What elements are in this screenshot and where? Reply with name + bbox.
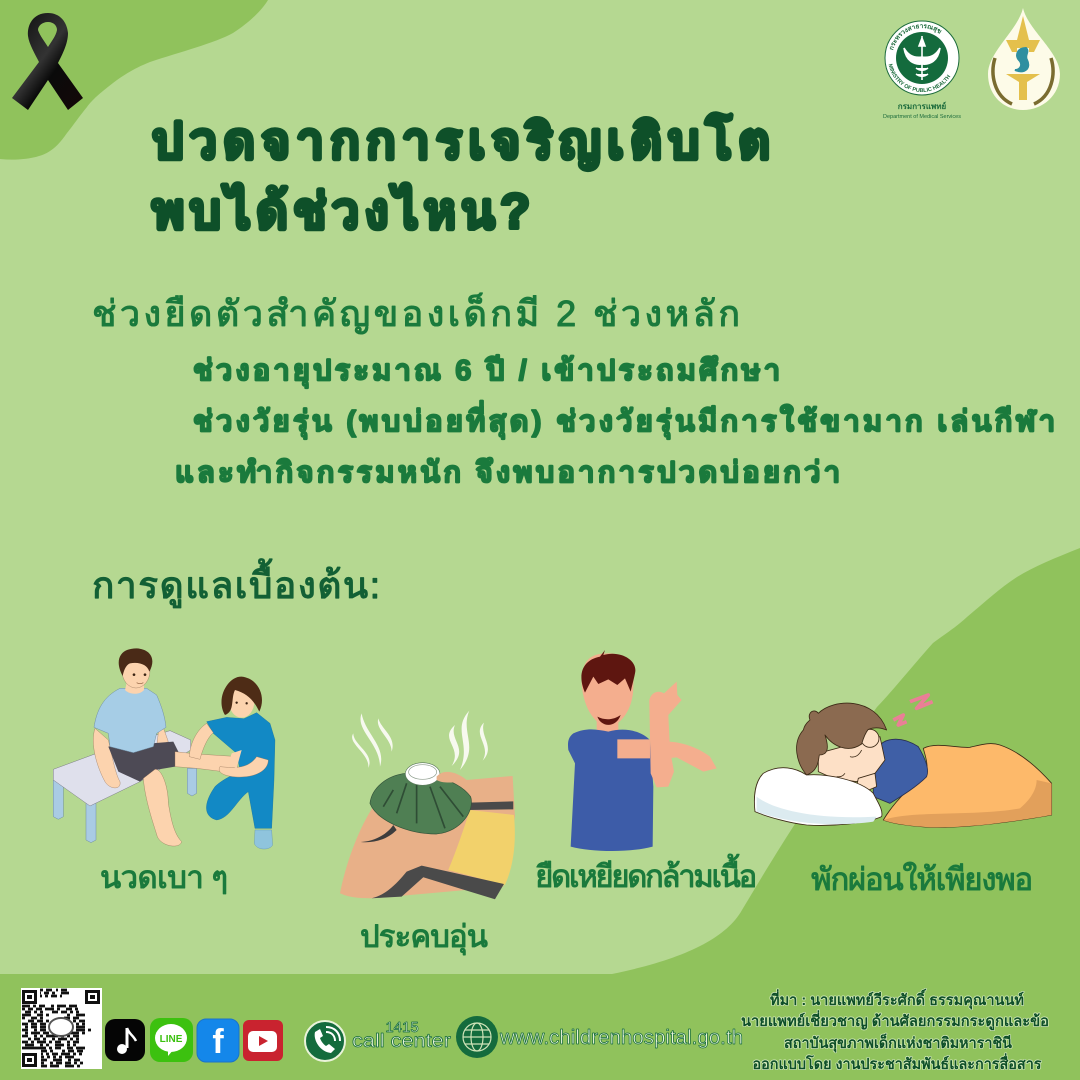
title: ปวดจากการเจริญเติบโต <box>152 112 770 170</box>
label: hot compress: ประคบอุ่น <box>360 919 488 956</box>
icon: black mourning ribbon <box>12 13 83 110</box>
icon: Facebook <box>197 1019 239 1062</box>
steam <box>352 711 488 770</box>
illustration: massage <box>53 648 275 849</box>
label: massage: นวดเบา ๆ <box>100 860 228 895</box>
QR code <box>21 988 102 1069</box>
text: credits: ออกแบบโดย งานประชาสัมพันธ์และการสื่อสาร <box>752 1053 1042 1073</box>
illustration: hot compress <box>340 711 515 899</box>
title <box>152 112 770 239</box>
text: credits: ที่มา : นายแพทย์วีระศักดิ์ ธรรมคุณานนท์ <box>770 988 1024 1010</box>
logo: Ministry of Public Health: Department of Medical Services <box>883 114 961 120</box>
text: website: www.childrenhospital.go.th <box>499 1027 743 1049</box>
icon: TikTok <box>105 1019 145 1061</box>
text: call center 1415: 1415 <box>385 1019 419 1036</box>
logo: Ministry of Public Health: MINISTRY OF PUBLIC HEALTH <box>888 64 950 92</box>
nurse arms <box>189 723 213 759</box>
label: rest: พักผ่อนให้เพียงพอ <box>811 862 1033 897</box>
subheading: two growth periods: ช่วงยืดตัวสำคัญของเด็กมี 2 ช่วงหลัก <box>92 291 740 334</box>
logo: children's hospital drop <box>988 8 1060 110</box>
text: call center 1415: call center <box>352 1031 452 1052</box>
text block: growth periods <box>175 355 1055 489</box>
icon: LINE: LINE <box>160 1034 183 1045</box>
nurse uniform <box>206 713 275 828</box>
footer band <box>0 974 1080 1080</box>
icon: globe <box>456 1016 498 1058</box>
logo: Ministry of Public Health: กรมการแพทย์ <box>898 101 947 111</box>
text: credits: นายแพทย์เชี่ยวชาญ ด้านศัลยกรรมกระดูกและข้อ <box>741 1010 1049 1031</box>
text: credits <box>741 988 1049 1073</box>
logo: Ministry of Public Health <box>883 20 961 120</box>
background blob: top left <box>0 0 268 160</box>
text: credits: สถาบันสุขภาพเด็กแห่งชาติมหาราชินี <box>784 1033 1013 1053</box>
illustration: stretching <box>568 650 717 851</box>
illustration: sleeping child <box>754 695 1052 827</box>
label: stretching: ยืดเหยียดกล้ามเนื้อ <box>535 854 757 894</box>
title: พบได้ช่วงไหน? <box>152 182 530 239</box>
background blob: bottom right <box>612 548 1080 974</box>
icon: YouTube <box>243 1020 283 1061</box>
icon: Facebook: f <box>212 1023 224 1061</box>
heading: first aid care: การดูแลเบื้องต้น: <box>92 558 380 608</box>
text block: growth periods: ช่วงอายุประมาณ 6 ปี / เข้าประถมศึกษา <box>193 355 780 388</box>
logo: Ministry of Public Health: กระทรวงสาธารณสุข <box>890 24 942 50</box>
icon: phone <box>305 1021 345 1061</box>
icon: LINE <box>150 1018 193 1062</box>
text block: growth periods: ช่วงวัยรุ่น (พบบ่อยที่สุด) ช่วงวัยรุ่นมีการใช้ขามาก เล่นกีฬา <box>193 400 1055 439</box>
text: call center 1415 <box>352 1019 452 1052</box>
text block: growth periods: และทำกิจกรรมหนัก จึงพบอาการปวดบ่อยกว่า <box>175 457 840 489</box>
